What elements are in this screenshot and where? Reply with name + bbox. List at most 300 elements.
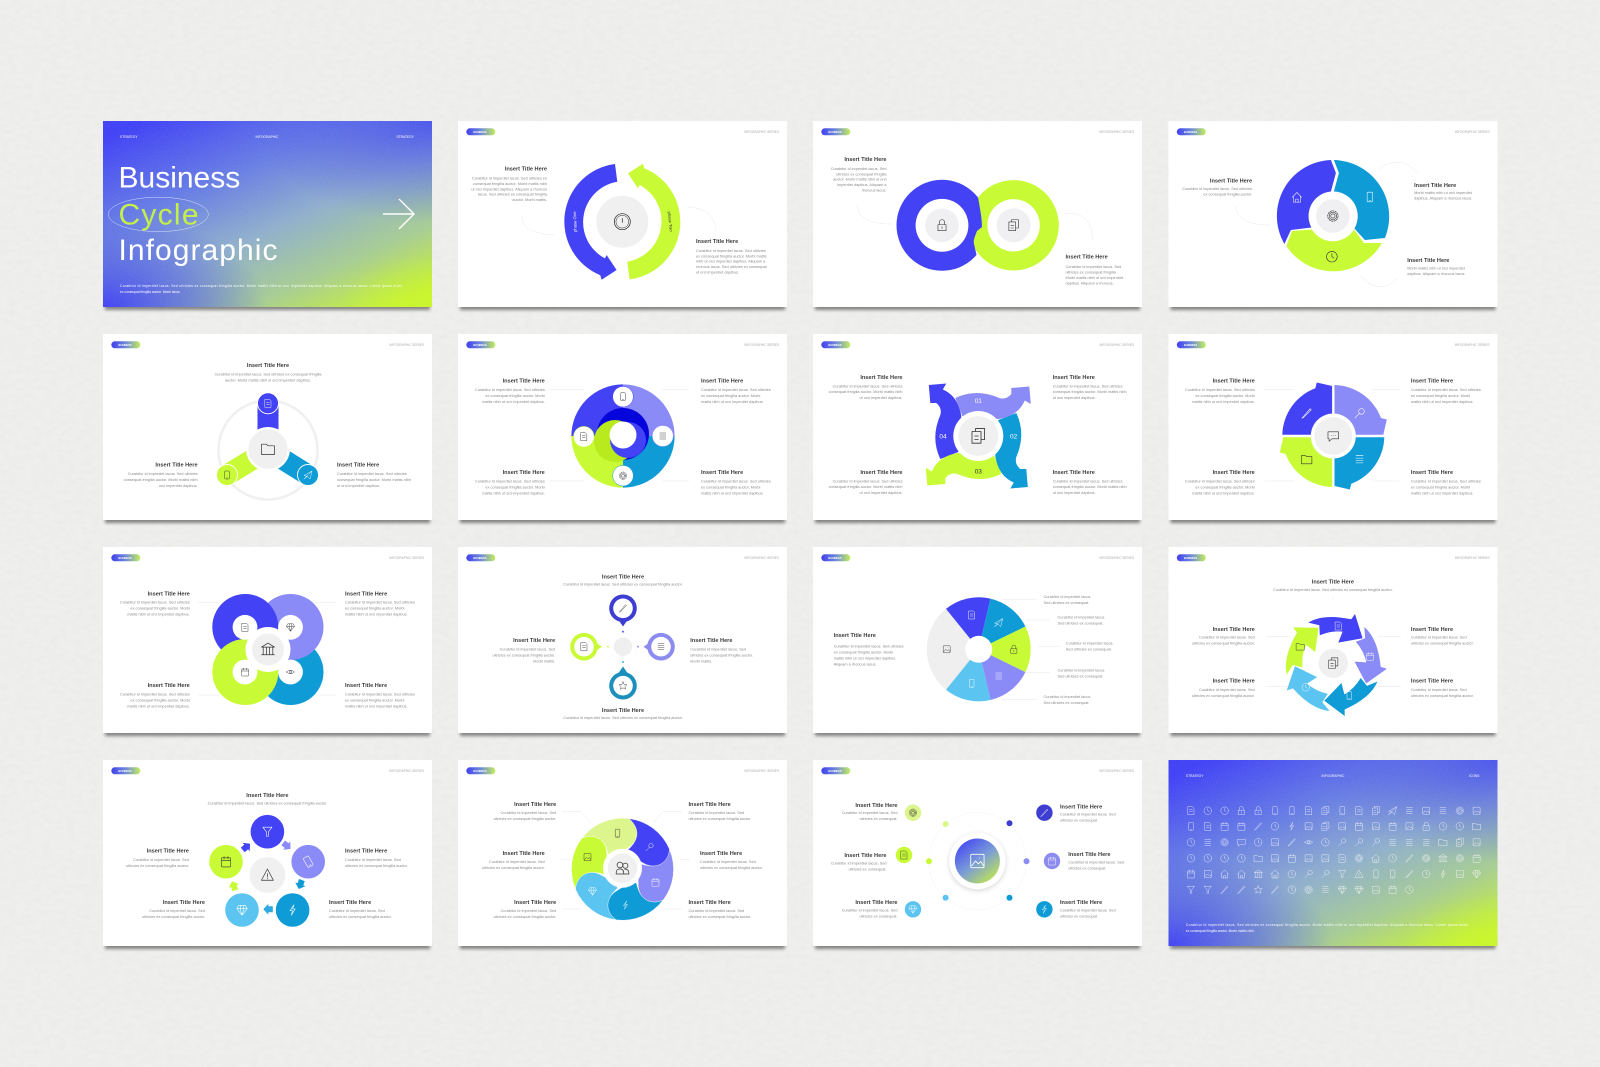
- text block left: consequat fringilla auctor. Morbi mattis nibh: [124, 478, 198, 482]
- text block left: Curabitur id imperdiet lacus. Sed ultricies: [834, 644, 904, 648]
- text block top right: Curabitur id imperdiet lacus. Sed: [1060, 813, 1116, 817]
- header: [466, 554, 779, 561]
- text block mid left: [482, 851, 545, 870]
- header: [466, 128, 779, 135]
- text block bottom right: mattis nibh ut orci imperdiet dapibus.: [701, 491, 764, 495]
- text block top right: ultricies ex consequat fringilla auctor.: [688, 817, 751, 821]
- slice label 2: Curabitur id imperdiet lacus.: [1058, 616, 1105, 620]
- text block left: Curabitur id imperdiet lacus. Sed ultricies: [1182, 187, 1252, 191]
- circle cycle chart: [209, 815, 325, 927]
- dotted connector right: [1064, 213, 1092, 240]
- header: INFOGRAPHIC SERIES: [1099, 769, 1134, 773]
- text block bottom left: Curabitur id imperdiet lacus. Sed ultricies: [475, 479, 545, 483]
- text block upper right: [1411, 627, 1474, 646]
- slice label 5: Sed ultricies ex consequat.: [1044, 701, 1089, 705]
- text block left: ultricies ex consequat fringilla auctor.: [492, 653, 555, 657]
- text block mid left: ultricies ex consequat fringilla auctor.: [482, 866, 545, 870]
- text block left: auctor. Morbi mattis.: [512, 198, 547, 202]
- text block bottom right: Insert Title Here: [701, 470, 743, 476]
- arrow chart: 02: [1010, 433, 1018, 440]
- text block right: dapibus. Aliquam a rhoncus lacus.: [1414, 196, 1472, 200]
- text block upper right: ultricies ex consequat fringilla auctor.: [1411, 642, 1474, 646]
- text block right: [1066, 255, 1124, 285]
- text block top right: Insert Title Here: [1060, 804, 1102, 810]
- icon grid: [1187, 806, 1481, 894]
- bottom description: [1186, 923, 1469, 933]
- text block left: Curabitur id imperdiet lacus. Sed: [133, 858, 189, 862]
- text block lower right: [1411, 678, 1474, 698]
- text block right: [690, 638, 753, 663]
- text block right: [345, 849, 408, 868]
- text block left: [831, 157, 887, 193]
- text block top right: ultricies ex consequat.: [1060, 819, 1098, 823]
- text block left: ultricies ex consequat fringilla auctor.: [126, 864, 189, 868]
- header: INFOGRAPHIC SERIES: [389, 769, 424, 773]
- text block top left: Insert Title Here: [514, 802, 556, 808]
- text block right: ultricies ex consequat fringilla auctor.: [345, 864, 408, 868]
- text block top right: Insert Title Here: [345, 592, 387, 598]
- text block bottom right: ut orci imperdiet dapibus.: [1053, 491, 1096, 495]
- text block bottom right: ex consequat fringilla auctor. Morbi: [701, 485, 761, 489]
- text block low left: [493, 900, 556, 919]
- text block bottom: Insert Title Here: [602, 708, 644, 714]
- text block top left: mattis nibh ut orci imperdiet dapibus.: [482, 400, 545, 404]
- text block bottom left: [142, 900, 205, 919]
- text block upper left: [1192, 627, 1255, 646]
- text block left: Curabitur id imperdiet lacus. Sed: [500, 647, 555, 651]
- connector lines: [1264, 390, 1400, 481]
- text block top left: [120, 592, 190, 617]
- text block top left: Curabitur id imperdiet lacus. Sed ultricies: [833, 384, 903, 388]
- text block top right: mattis nibh ut orci imperdiet dapibus.: [1411, 400, 1474, 404]
- text block low left: ultricies ex consequat fringilla auctor.: [493, 915, 556, 919]
- text block top right: ex consequat fringilla auctor. Morbi: [1411, 394, 1470, 398]
- header: [1177, 128, 1490, 135]
- text block right: ut orci imperdiet dapibus.: [696, 270, 739, 274]
- text block top left: Curabitur id imperdiet lacus. Sed: [842, 811, 898, 815]
- text block left: [124, 463, 198, 488]
- text block low right: [1060, 900, 1116, 919]
- text block top right: Curabitur id imperdiet lacus. Sed ultricies: [701, 388, 771, 392]
- text block bottom left: [120, 683, 190, 708]
- text block top right: consequat fringilla auctor. Morbi mattis nibh: [1053, 390, 1127, 394]
- text block lower left: Insert Title Here: [1213, 678, 1255, 684]
- text block right: ex consequat fringilla auctor. Morbi mattis: [696, 254, 767, 258]
- text block top left: Insert Title Here: [860, 375, 902, 381]
- text block right: Curabitur id imperdiet lacus. Sed: [1066, 265, 1121, 269]
- text block bottom right: ex consequat fringilla auctor. Morbi: [1411, 485, 1470, 489]
- top labels: ICONS: [1469, 774, 1480, 778]
- text block top right: Curabitur id imperdiet lacus. Sed: [688, 811, 744, 815]
- text block right: consequat fringilla auctor. Morbi mattis nibh: [337, 478, 411, 482]
- header: [466, 767, 779, 774]
- text block top left: mattis nibh ut orci imperdiet dapibus.: [127, 613, 190, 617]
- text block low left: [842, 900, 898, 919]
- text block top left: ex consequat fringilla auctor. Morbi: [1195, 394, 1255, 398]
- header: BUSINESS: [828, 556, 842, 560]
- panel: six slice pie: [813, 547, 1142, 736]
- text block mid left: Insert Title Here: [503, 851, 545, 857]
- text block low left: Insert Title Here: [855, 900, 898, 906]
- bottom description: ex consequat fringilla auctor. Morbi mattis nibh.: [1186, 929, 1255, 933]
- text block bottom right: Curabitur id imperdiet lacus. Sed ultricies: [1053, 479, 1123, 483]
- slice label 1: Curabitur id imperdiet lacus.: [1044, 595, 1091, 599]
- swirl chart: [571, 384, 675, 488]
- text block bottom left: [829, 470, 903, 495]
- dotted connector right: [688, 207, 716, 233]
- hub chart: [216, 393, 318, 500]
- text block right: Curabitur id imperdiet lacus. Sed: [345, 858, 401, 862]
- text block top left: [1185, 379, 1255, 404]
- text block top left: Insert Title Here: [148, 592, 190, 598]
- text block bottom left: Curabitur id imperdiet lacus. Sed: [149, 909, 205, 913]
- text block top left: mattis nibh ut orci imperdiet dapibus.: [1192, 400, 1255, 404]
- text block bottom left: Curabitur id imperdiet lacus. Sed ultricies: [833, 479, 903, 483]
- text block top right: [701, 379, 771, 404]
- text block left: imperdiet dapibus. Aliquam a: [837, 183, 887, 187]
- header: BUSINESS: [828, 769, 842, 773]
- text block lower right: ultricies ex consequat fringilla auctor.: [1411, 694, 1474, 698]
- text block bottom: [563, 708, 683, 720]
- text block top: Curabitur id imperdiet lacus. Sed ultricies ex consequat fringilla auctor.: [1273, 588, 1393, 592]
- text block upper left: Insert Title Here: [1213, 627, 1255, 633]
- text block left: mattis nibh ut orci imperdiet dapibus.: [834, 656, 896, 660]
- text block bottom left: Insert Title Here: [148, 683, 190, 689]
- text block mid right: Insert Title Here: [700, 851, 742, 857]
- text block left: Morbi mattis.: [533, 659, 555, 663]
- connector lines: [198, 603, 336, 695]
- panel: quadrant arrows: [1168, 334, 1498, 523]
- cover top labels: STRATEGY: [120, 135, 138, 139]
- text block right: Morbi mattis nibh ut orci imperdiet: [1066, 276, 1124, 280]
- text block left: [126, 849, 189, 868]
- header: BUSINESS: [118, 769, 132, 773]
- cover title: Business: [118, 162, 240, 195]
- text block bottom right: Curabitur id imperdiet lacus. Sed ultricies: [701, 479, 771, 483]
- header: INFOGRAPHIC SERIES: [1455, 556, 1490, 560]
- text block top right: Insert Title Here: [1053, 375, 1095, 381]
- text block left: [834, 633, 904, 666]
- panel: cover slide: [103, 121, 432, 310]
- text block mid right: [700, 851, 763, 870]
- text block low left: ultricies ex consequat.: [859, 915, 898, 919]
- slice label 4: [1058, 668, 1105, 678]
- text block low left: Curabitur id imperdiet lacus. Sed: [842, 909, 898, 913]
- text block mid left: [831, 853, 886, 871]
- cover top labels: INFOGRAPHIC: [256, 135, 279, 139]
- header: BUSINESS: [118, 343, 132, 347]
- text block top: [563, 575, 683, 587]
- arrow chart: 01: [975, 398, 982, 405]
- text block bottom right: consequat fringilla auctor. Morbi mattis nibh: [1053, 485, 1127, 489]
- text block left: Curabitur id imperdiet lacus. Sed ultricies ex: [472, 177, 547, 181]
- panel: five circles with small arrows: [103, 760, 432, 949]
- cycle chart: phase Two: [667, 211, 674, 232]
- slice label 3: Sed ultricies ex consequat.: [1066, 648, 1112, 652]
- cover description: Curabitur id imperdiet lacus. Sed ultricies ex consequat fringilla auctor. Morbi mattis nibh ut orci imperdiet dapibus. Aliquam a rhoncus lacus. Lorem ipsum dolor: [120, 284, 403, 288]
- text block left: orci imperdiet dapibus.: [159, 484, 198, 488]
- cover title: Cycle: [118, 198, 198, 231]
- header: INFOGRAPHIC SERIES: [1099, 556, 1134, 560]
- text block top left: Curabitur id imperdiet lacus. Sed ultricies: [475, 388, 545, 392]
- text block right: [696, 239, 768, 274]
- cover title: [118, 162, 278, 267]
- text block right: Insert Title Here: [345, 849, 387, 855]
- text block bottom right: Insert Title Here: [345, 683, 387, 689]
- text block top right: Insert Title Here: [688, 802, 731, 808]
- text block bottom left: Curabitur id imperdiet lacus. Sed ultricies: [1185, 479, 1255, 483]
- text block top left: Insert Title Here: [503, 379, 545, 385]
- text block bottom right: Curabitur id imperdiet lacus. Sed ultricies: [345, 693, 415, 697]
- text block top right: Curabitur id imperdiet lacus. Sed ultricies: [1411, 388, 1481, 392]
- text block low left: Insert Title Here: [514, 900, 556, 906]
- panel: three arm hub: [103, 334, 432, 523]
- top labels: STRATEGY: [1186, 774, 1204, 778]
- text block mid left: Curabitur id imperdiet lacus. Sed: [831, 861, 886, 865]
- text block mid right: Curabitur id imperdiet lacus. Sed: [1068, 860, 1124, 864]
- text block top: Insert Title Here: [246, 793, 288, 799]
- text block top left: ex consequat fringilla auctor. Morbi: [485, 394, 545, 398]
- slice label 5: Curabitur id imperdiet lacus.: [1044, 695, 1091, 699]
- cycle chart: [564, 164, 680, 280]
- text block top left: [842, 803, 898, 821]
- cover title: Infographic: [118, 234, 278, 267]
- top labels: INFOGRAPHIC: [1321, 774, 1345, 778]
- text block left: Insert Title Here: [505, 166, 547, 172]
- text block low right: Curabitur id imperdiet lacus. Sed: [1060, 909, 1116, 913]
- dotted connector left: [1236, 206, 1270, 225]
- text block lower left: Curabitur id imperdiet lacus. Sed: [1199, 688, 1255, 692]
- text block lower right: Insert Title Here: [1411, 678, 1453, 684]
- text block bottom left: consequat fringilla auctor. Morbi mattis nibh: [829, 485, 902, 489]
- text block top right: [688, 802, 751, 821]
- text block top: Insert Title Here: [247, 363, 289, 369]
- rings chart: [896, 180, 1059, 271]
- text block top right: ut orci imperdiet dapibus.: [1053, 396, 1096, 400]
- text block low right: [688, 900, 751, 919]
- text block bottom left: ex consequat fringilla auctor. Morbi: [130, 699, 190, 703]
- text block left: [492, 638, 555, 663]
- header: [466, 341, 779, 348]
- text block low right: Curabitur id imperdiet lacus. Sed: [688, 909, 744, 913]
- cover top labels: STRATEGY: [396, 135, 415, 139]
- header: BUSINESS: [473, 769, 487, 773]
- highlight ellipse around Cycle: [108, 197, 208, 232]
- text block low right: ultricies ex consequat fringilla auctor.: [688, 915, 751, 919]
- header: BUSINESS: [1184, 130, 1197, 134]
- text block bottom left: Insert Title Here: [860, 470, 902, 476]
- header: [821, 767, 1134, 774]
- text block top right: Insert Title Here: [1411, 379, 1453, 385]
- text block bottom left: Insert Title Here: [163, 900, 205, 906]
- dotted connectors: [1266, 598, 1401, 687]
- text block upper left: Curabitur id imperdiet lacus. Sed: [1199, 636, 1255, 640]
- text block mid right: Insert Title Here: [1068, 852, 1110, 858]
- header: INFOGRAPHIC SERIES: [389, 343, 424, 347]
- text block right: Insert Title Here: [337, 463, 379, 469]
- header: BUSINESS: [473, 130, 487, 134]
- dotted connectors: [1002, 599, 1060, 699]
- text block top left: Curabitur id imperdiet lacus. Sed: [501, 811, 556, 815]
- text block top right: ex consequat fringilla auctor. Morbi: [345, 607, 405, 611]
- text block top right: Insert Title Here: [701, 379, 743, 385]
- text block right: Insert Title Here: [1414, 183, 1456, 189]
- text block right: ultricies ex consequat fringilla auctor.: [690, 653, 753, 657]
- panel: four map pins: [458, 547, 787, 736]
- slice label 2: Sed ultricies ex consequat.: [1058, 622, 1103, 626]
- text block top left: [829, 375, 903, 400]
- quadrant chart: [1280, 382, 1387, 490]
- text block top right: mattis nibh ut orci imperdiet dapibus.: [701, 400, 764, 404]
- text block bottom right: ex consequat fringilla auctor. Morbi: [345, 699, 405, 703]
- header: [1177, 554, 1490, 561]
- header: BUSINESS: [1184, 556, 1197, 560]
- text block mid left: Curabitur id imperdiet lacus. Sed: [489, 860, 545, 864]
- text block top left: Insert Title Here: [1213, 379, 1255, 385]
- text block right: rhoncus lacus. Sed ultricies ex consequat: [696, 265, 768, 269]
- slice label 3: [1066, 642, 1114, 652]
- header: INFOGRAPHIC SERIES: [389, 556, 424, 560]
- text block bottom right: [701, 470, 771, 495]
- text block left: ex consequat fringilla auctor. Morbi: [834, 650, 893, 654]
- panel: four petals: [103, 547, 432, 736]
- text block left: Insert Title Here: [147, 849, 189, 855]
- swirl chart: [555, 803, 690, 935]
- panel: two phase cycle: [458, 121, 787, 310]
- text block right: Insert Title Here: [696, 239, 738, 245]
- text block top right: mattis nibh ut orci imperdiet dapibus.: [345, 613, 408, 617]
- text block lower right: Curabitur id imperdiet lacus. Sed: [1411, 688, 1467, 692]
- text block bottom: [1407, 258, 1466, 276]
- cycle chart: phase One: [572, 211, 578, 232]
- header: [821, 128, 1134, 135]
- header: [111, 767, 424, 774]
- header: BUSINESS: [828, 343, 842, 347]
- text block upper right: Curabitur id imperdiet lacus. Sed: [1411, 636, 1467, 640]
- arrow chart: 04: [939, 433, 947, 440]
- header: [1177, 341, 1490, 348]
- text block mid left: ultricies ex consequat.: [848, 867, 886, 871]
- text block top: [208, 793, 327, 806]
- arrow: [383, 199, 414, 229]
- text block top left: consequat fringilla auctor. Morbi mattis nibh: [829, 390, 902, 394]
- text block top right: Curabitur id imperdiet lacus. Sed ultricies: [345, 601, 415, 605]
- text block top right: [1060, 804, 1116, 823]
- orbit chart: [896, 804, 1060, 918]
- text block bottom right: Curabitur id imperdiet lacus. Sed ultricies: [1411, 479, 1481, 483]
- text block bottom left: ex consequat fringilla auctor. Morbi: [485, 485, 545, 489]
- petal chart: [212, 594, 324, 705]
- dotted connector left: [858, 205, 892, 224]
- header: BUSINESS: [828, 130, 842, 134]
- header: BUSINESS: [1184, 343, 1197, 347]
- text block top right: [345, 592, 415, 617]
- text block left: Curabitur id imperdiet lacus. Sed: [831, 167, 886, 171]
- text block top left: ultricies ex consequat fringilla auctor.: [493, 817, 556, 821]
- text block bottom left: mattis nibh ut orci imperdiet dapibus.: [127, 704, 190, 708]
- cover top labels: [120, 135, 415, 139]
- panel: icon set slide: [1168, 760, 1498, 949]
- arrow chart: [926, 384, 1031, 488]
- text block low right: ultricies ex consequat.: [1060, 915, 1098, 919]
- cover description: ex consequat fringilla auctor. Morbi lacus.: [120, 290, 181, 294]
- text block right: Curabitur id imperdiet lacus. Sed ultricies: [337, 472, 407, 476]
- text block bottom right: Insert Title Here: [329, 900, 371, 906]
- slice label 1: Sed ultricies ex consequat.: [1044, 601, 1089, 605]
- text block mid right: Curabitur id imperdiet lacus. Sed: [700, 860, 756, 864]
- text block bottom left: [1185, 470, 1255, 495]
- text block right: [1414, 183, 1473, 200]
- arrow chart: 03: [975, 469, 982, 476]
- arrow cycle chart: [1279, 614, 1389, 720]
- text block left: [1182, 178, 1252, 197]
- text block left: consequat fringilla auctor. Morbi mattis nibh: [473, 182, 547, 186]
- text block left: Insert Title Here: [844, 157, 886, 163]
- text block bottom right: mattis nibh ut orci imperdiet dapibus.: [345, 704, 408, 708]
- text block top left: Curabitur id imperdiet lacus. Sed ultricies: [120, 601, 190, 605]
- slice label 4: Curabitur id imperdiet lacus.: [1058, 668, 1105, 672]
- header: INFOGRAPHIC SERIES: [744, 556, 779, 560]
- text block bottom right: Insert Title Here: [1411, 470, 1453, 476]
- text block right: Curabitur id imperdiet lacus. Sed: [690, 647, 746, 651]
- text block top left: [493, 802, 556, 821]
- text block left: Curabitur id imperdiet lacus. Sed ultricies: [128, 472, 198, 476]
- header: INFOGRAPHIC SERIES: [1099, 130, 1134, 134]
- text block top left: ultricies ex consequat.: [859, 817, 898, 821]
- panel: orbit diagram: [813, 760, 1142, 949]
- slice label 2: [1058, 616, 1105, 626]
- text block left: rhoncus lacus.: [862, 189, 886, 193]
- header: [821, 554, 1134, 561]
- text block left: ut orci imperdiet dapibus. Aliquam a rhoncus: [471, 187, 547, 191]
- text block right: Morbi mattis nibh ut orci imperdiet: [1414, 191, 1473, 195]
- text block low right: Insert Title Here: [688, 900, 731, 906]
- text block right: Insert Title Here: [690, 638, 732, 644]
- text block bottom right: Curabitur id imperdiet lacus. Sed: [329, 909, 385, 913]
- text block bottom left: ultricies ex consequat fringilla auctor.: [142, 915, 205, 919]
- dotted connectors: [561, 812, 689, 909]
- text block top right: Curabitur id imperdiet lacus. Sed ultricies: [1053, 384, 1123, 388]
- text block bottom right: [1411, 470, 1481, 495]
- text block bottom left: Insert Title Here: [1213, 470, 1255, 476]
- panel: three segment pie: [1168, 121, 1498, 310]
- text block bottom: Morbi mattis nibh ut orci imperdiet: [1407, 267, 1466, 271]
- text block bottom left: Insert Title Here: [503, 470, 545, 476]
- cover description: [120, 284, 403, 294]
- header: BUSINESS: [473, 556, 487, 560]
- header: BUSINESS: [473, 343, 487, 347]
- text block bottom right: Insert Title Here: [1053, 470, 1095, 476]
- text block left: Aliquam a rhoncus lacus.: [834, 662, 877, 666]
- text block left: ex consequat fringilla auctor.: [1203, 193, 1252, 197]
- text block top right: [1411, 379, 1481, 404]
- text block right: ut orci imperdiet dapibus.: [337, 484, 380, 488]
- text block top left: ex consequat fringilla auctor. Morbi: [130, 607, 190, 611]
- connector lines: [549, 390, 689, 481]
- text block right: Insert Title Here: [1066, 255, 1108, 261]
- header: BUSINESS: [118, 556, 132, 560]
- header: [111, 554, 424, 561]
- header: [821, 341, 1134, 348]
- text block mid right: [1068, 852, 1124, 870]
- header: INFOGRAPHIC SERIES: [1099, 343, 1134, 347]
- text block bottom right: [345, 683, 415, 708]
- header: INFOGRAPHIC SERIES: [744, 769, 779, 773]
- text block bottom right: ultricies ex consequat fringilla auctor.: [329, 915, 392, 919]
- text block low right: Insert Title Here: [1060, 900, 1102, 906]
- text block bottom left: mattis nibh ut orci imperdiet dapibus.: [482, 491, 545, 495]
- text block top: [214, 363, 322, 382]
